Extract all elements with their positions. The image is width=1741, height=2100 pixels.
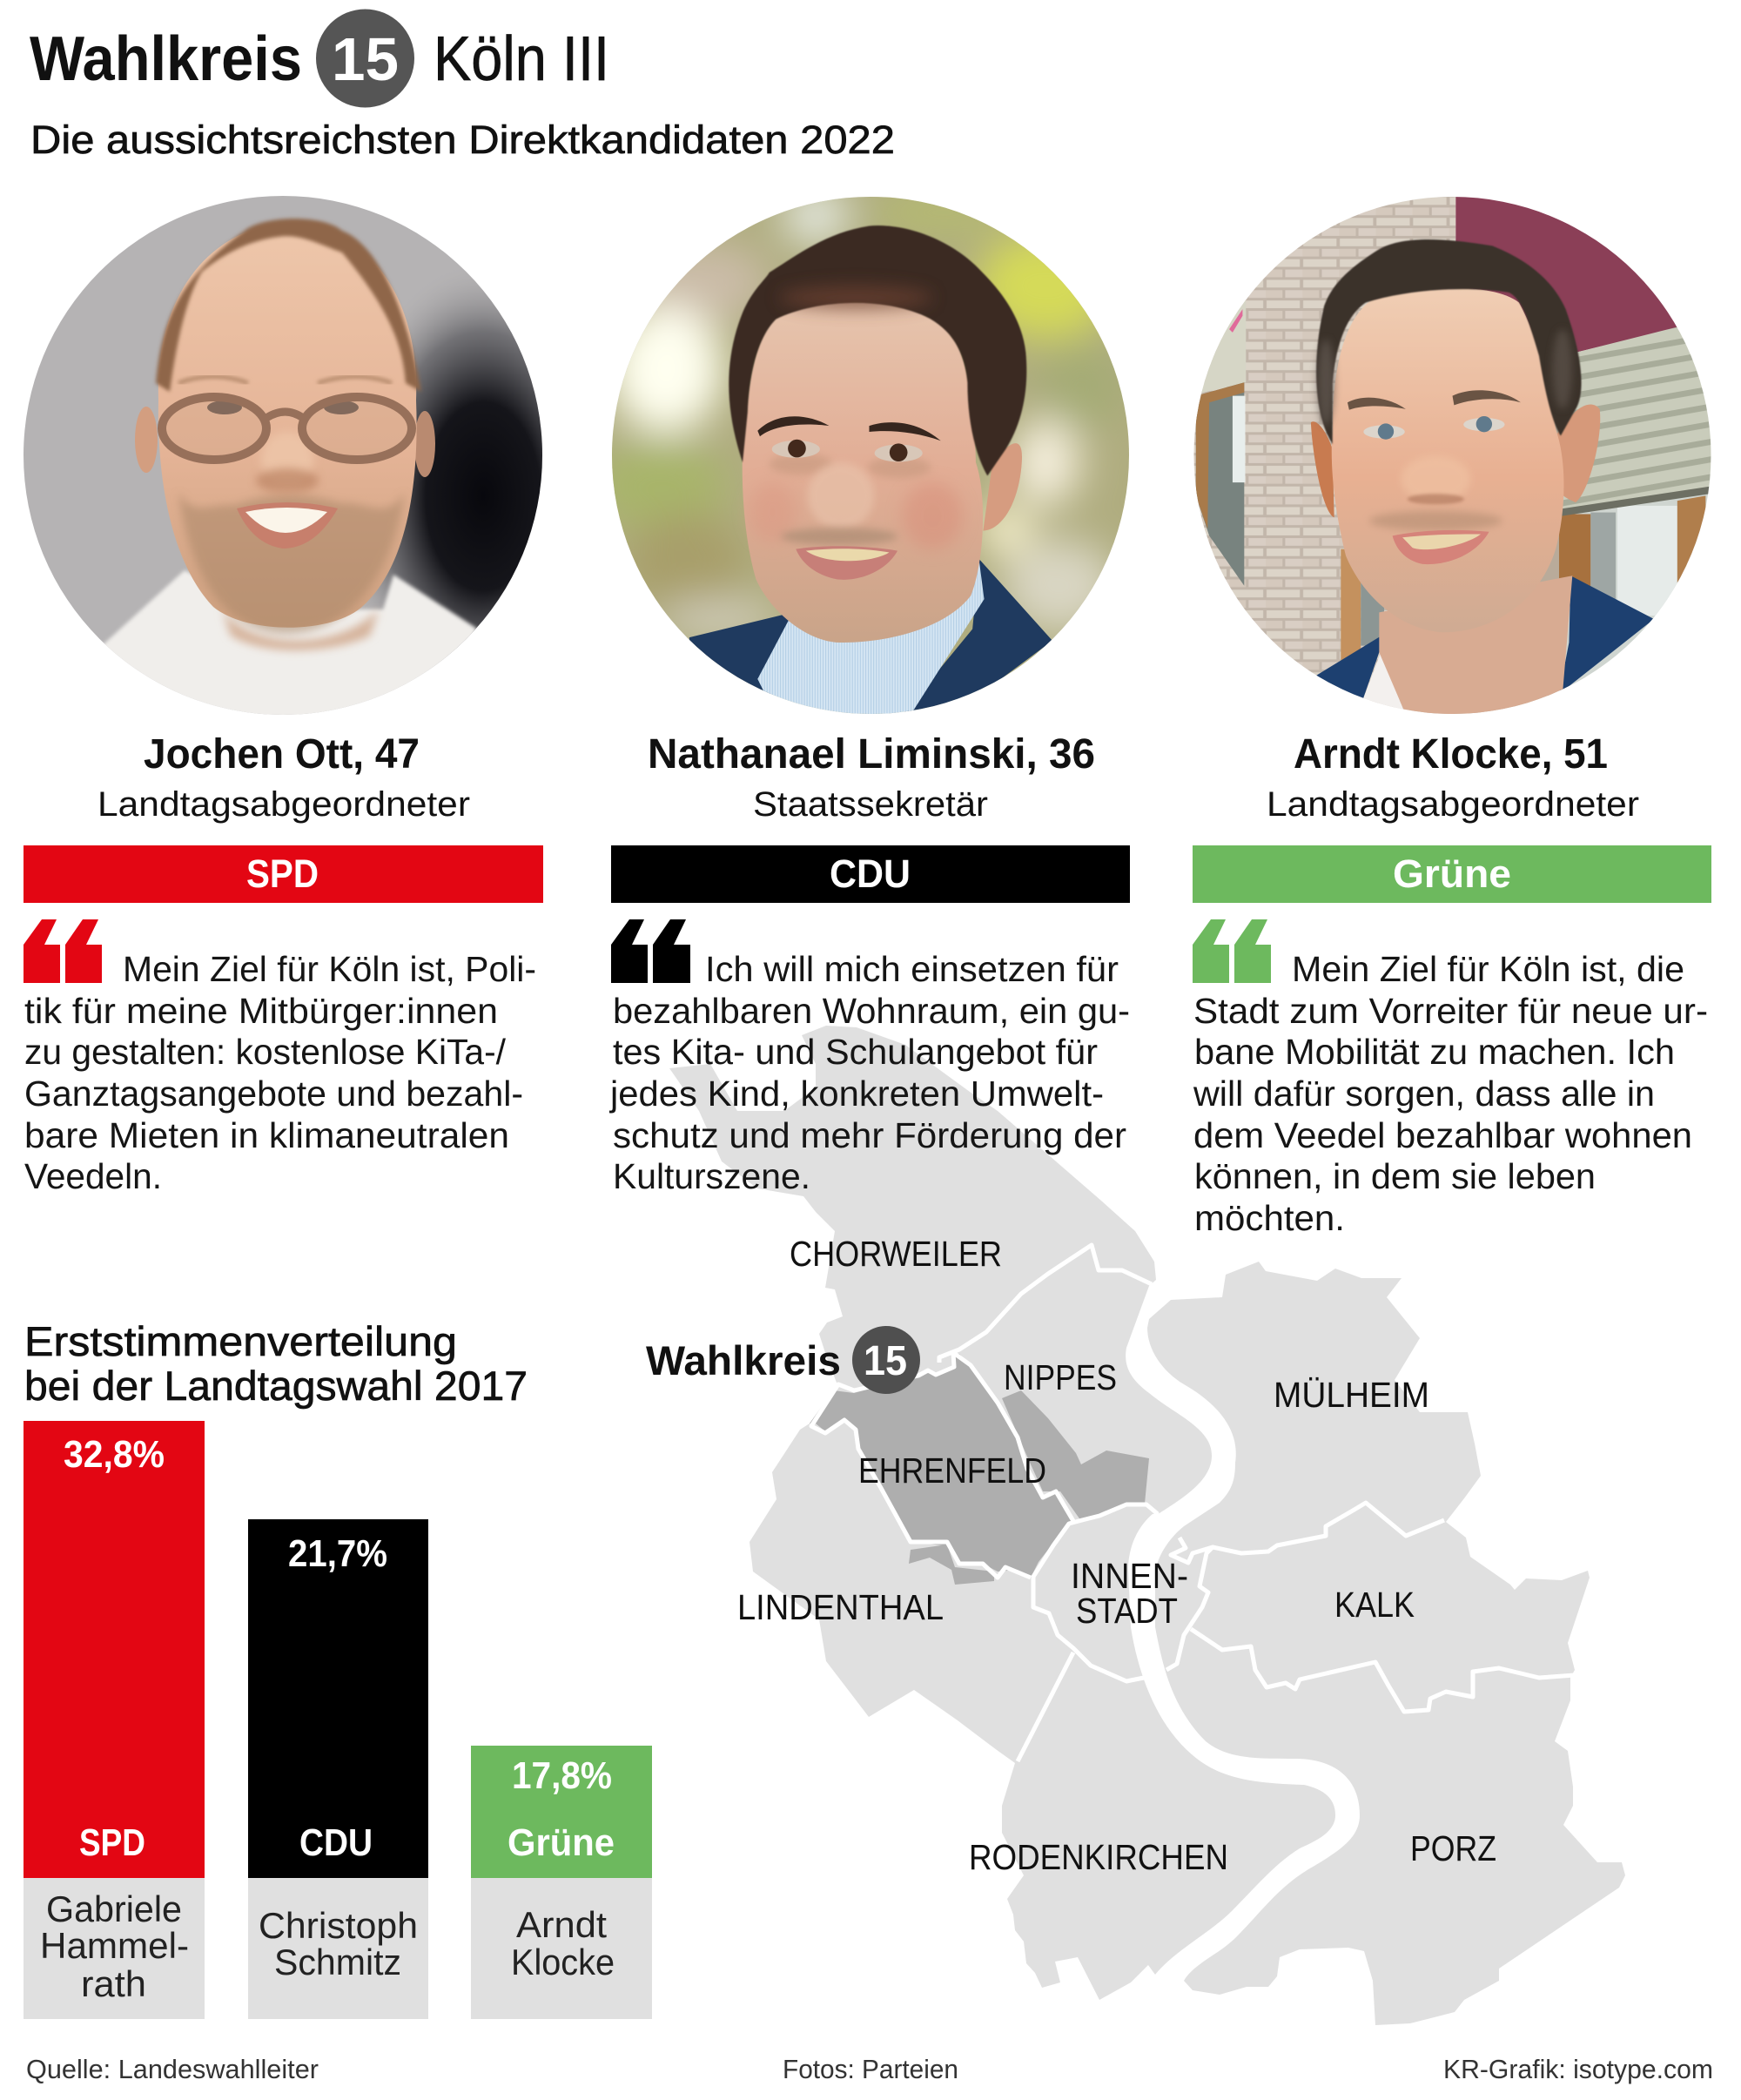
portrait: Jochen Ott <box>24 196 542 715</box>
map callout: Wahlkreis 15: Wahlkreis <box>646 1337 841 1383</box>
bar: CDU: CDU <box>299 1821 373 1864</box>
bar: SPD: SPD <box>79 1821 145 1864</box>
quote text: will dafür sorgen, dass alle in <box>1193 1074 1655 1114</box>
bar: Grüne: Grüne <box>508 1821 615 1864</box>
map: west bank districts <box>669 1026 1335 2000</box>
bar: CDU: Christoph <box>259 1905 418 1946</box>
map of Köln districts <box>646 1026 1625 2025</box>
map: Wahlkreis 15 highlighted area, Ehrenfeld <box>810 1354 1073 1578</box>
candidate role: Landtagsabgeordneter <box>97 785 470 824</box>
map label: Chorweiler: CHORWEILER <box>790 1234 1002 1274</box>
icon: quotation mark <box>611 919 690 983</box>
map callout: Wahlkreis 15: 15 <box>864 1338 907 1384</box>
map label: Lindenthal: LINDENTHAL <box>737 1587 944 1627</box>
map label: Innenstadt: INNEN- <box>1071 1556 1188 1596</box>
party bar SPD: SPD <box>246 851 319 896</box>
number badge 15: 15 <box>332 25 399 93</box>
bar: SPD <box>24 1421 205 2019</box>
bar: SPD: 32,8% <box>64 1433 165 1476</box>
subtitle: Die aussichtsreichsten Direktkandidaten 2022 <box>30 118 895 162</box>
quote text: Ganztagsangebote und bezahl- <box>24 1074 523 1114</box>
footer: source: Quelle: Landeswahlleiter <box>26 2054 319 2084</box>
quote text: tes Kita- und Schulangebot für <box>613 1032 1098 1072</box>
bar: SPD: Gabriele <box>46 1888 182 1929</box>
number badge 15 <box>316 9 414 108</box>
map label: Kalk: KALK <box>1334 1585 1415 1625</box>
quote text: Mein Ziel für Köln ist, die <box>1292 949 1684 989</box>
map label: Innenstadt <box>1071 1556 1188 1631</box>
map label: Rodenkirchen: RODENKIRCHEN <box>969 1837 1228 1877</box>
bar chart <box>24 1421 652 2019</box>
candidate role: Staatssekretär <box>753 785 988 824</box>
quote text: Stadt zum Vorreiter für neue ur- <box>1193 991 1708 1031</box>
panel: Jochen Ott, SPD <box>24 731 543 1196</box>
quote text: bare Mieten in klimaneutralen <box>24 1115 509 1155</box>
quote text: jedes Kind, konkreten Umwelt- <box>609 1074 1104 1114</box>
quote text: zu gestalten: kostenlose KiTa-/ <box>24 1032 507 1072</box>
map label: Innenstadt: STADT <box>1076 1591 1178 1631</box>
bar: CDU: Schmitz <box>274 1942 401 1982</box>
bar: Grüne: Arndt <box>516 1904 607 1945</box>
party bar SPD <box>24 845 543 903</box>
map: Wahlkreis 15 highlighted area, Lindenthal part <box>909 1545 994 1585</box>
bar: CDU: 21,7% <box>288 1532 387 1575</box>
candidate name: Nathanael Liminski, 36 <box>648 731 1095 777</box>
footer: graphic credit: KR-Grafik: isotype.com <box>1443 2054 1713 2084</box>
party bar CDU <box>611 845 1130 903</box>
portrait: Arndt Klocke <box>1189 192 1719 723</box>
quote text <box>609 949 1130 1196</box>
candidate name: Jochen Ott, 47 <box>144 731 420 777</box>
title <box>30 9 609 108</box>
footer: photo credit: Fotos: Parteien <box>783 2054 958 2084</box>
quote text: Mein Ziel für Köln ist, Poli- <box>123 949 536 989</box>
quote text: bane Mobilität zu machen. Ich <box>1194 1032 1675 1072</box>
quote text: Veedeln. <box>24 1156 162 1196</box>
chart heading: bei der Landtagswahl 2017 <box>24 1363 528 1409</box>
bar: SPD: rath <box>81 1963 146 2004</box>
map label: Ehrenfeld: EHRENFELD <box>858 1450 1046 1491</box>
quote text: schutz und mehr Förderung der <box>613 1115 1126 1155</box>
map: east bank districts <box>1147 1262 1625 2025</box>
map label: Nippes: NIPPES <box>1004 1357 1117 1397</box>
chart heading <box>24 1318 528 1409</box>
chart heading: Erststimmenverteilung <box>24 1318 457 1364</box>
candidate name: Arndt Klocke, 51 <box>1294 731 1608 777</box>
candidate role: Landtagsabgeordneter <box>1267 785 1639 824</box>
bar: SPD: Hammel- <box>40 1925 189 1966</box>
icon: quotation mark <box>24 919 102 983</box>
bar: Grüne <box>471 1746 652 2019</box>
map: Wahlkreis 15 highlighted area, Nippes part <box>1002 1390 1149 1521</box>
quote text: können, in dem sie leben <box>1194 1156 1596 1196</box>
quote text: Kulturszene. <box>613 1156 810 1196</box>
quote text <box>24 949 536 1196</box>
bar: Grüne: 17,8% <box>512 1754 612 1797</box>
quote text: Ich will mich einsetzen für <box>705 949 1119 989</box>
portrait: Nathanael Liminski <box>593 186 1136 723</box>
title: Wahlkreis: Wahlkreis <box>30 24 302 94</box>
party bar Grüne <box>1193 845 1711 903</box>
quote text: möchten. <box>1194 1198 1345 1238</box>
quote text: tik für meine Mitbürger:innen <box>24 991 498 1031</box>
party bar Grüne: Grüne <box>1393 851 1511 896</box>
party bar CDU: CDU <box>830 851 911 896</box>
map label: Mülheim: MÜLHEIM <box>1274 1375 1429 1415</box>
quote text: bezahlbaren Wohnraum, ein gu- <box>613 991 1130 1031</box>
map callout: Wahlkreis 15 <box>646 1326 920 1394</box>
bar: CDU <box>248 1519 428 2019</box>
panel: Nathanael Liminski, CDU <box>609 731 1130 1196</box>
map label: Porz: PORZ <box>1410 1828 1496 1868</box>
bar: Grüne: Klocke <box>511 1942 615 1982</box>
title: Köln III: Köln III <box>434 24 609 94</box>
quote text: dem Veedel bezahlbar wohnen <box>1193 1115 1692 1155</box>
icon: quotation mark <box>1193 919 1271 983</box>
quote text <box>1193 949 1708 1238</box>
panel: Arndt Klocke, Grüne <box>1193 731 1711 1238</box>
